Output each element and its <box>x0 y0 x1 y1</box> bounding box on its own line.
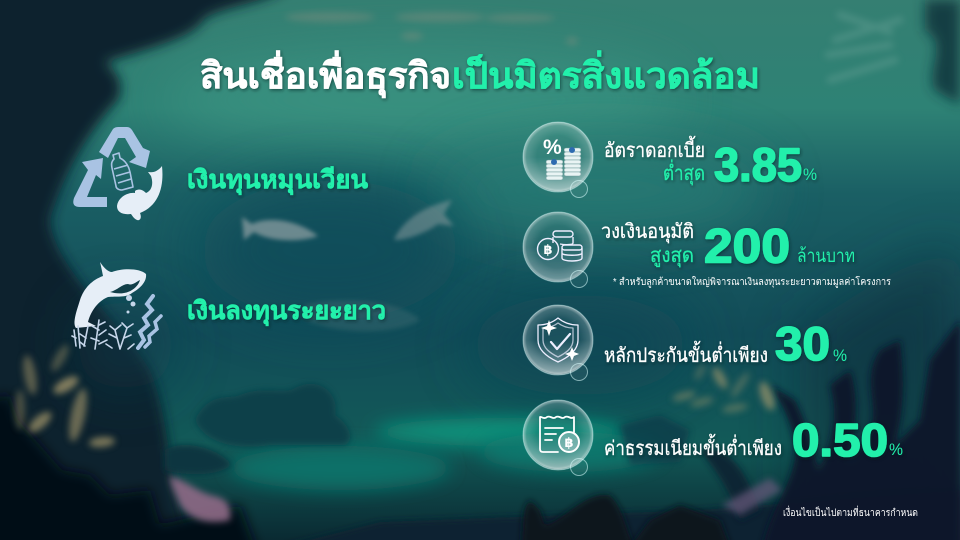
stat: interest rate 3.85%: ต่ำสุด <box>663 159 705 186</box>
icon: coral <box>72 320 134 349</box>
bright seabed band <box>375 418 625 446</box>
icon: whale <box>117 166 162 220</box>
blurred fish <box>242 200 454 331</box>
stat: fee 0.50%: 0.50 <box>792 414 888 466</box>
stat: credit limit 200 million baht: วงเงินอนุมัติ <box>601 221 694 244</box>
title: สินเชื่อเพื่อธุรกิจ <box>200 50 451 99</box>
dark plant silhouettes <box>0 320 960 540</box>
icon: seaweed <box>138 296 161 348</box>
left dark rock <box>0 0 295 540</box>
bubble: interest rate <box>523 122 593 198</box>
stat: credit limit 200 million baht: ล้านบาท <box>797 246 855 267</box>
bubble: credit limit <box>523 212 593 288</box>
pink coral <box>170 476 782 522</box>
title <box>200 50 760 99</box>
stat: collateral 30% <box>604 317 847 370</box>
icon: recycle arrows with bottle and whale <box>73 127 162 220</box>
bubble: fee <box>523 400 593 476</box>
stat: collateral 30%: % <box>833 346 847 365</box>
stat: credit limit 200 million baht: 200 <box>704 220 790 274</box>
bubble: interest rate: % <box>543 136 562 159</box>
stat: collateral 30%: 30 <box>775 317 830 370</box>
stat: fee 0.50% <box>604 414 903 466</box>
stat: fee 0.50%: % <box>889 440 903 459</box>
heading: working capital: เงินทุนหมุนเวียน <box>187 166 368 196</box>
icon: bottle <box>112 153 133 190</box>
stat: fee 0.50%: ค่าธรรมเนียมขั้นต่ำเพียง <box>604 434 782 460</box>
bubble: collateral <box>523 305 593 380</box>
stat: collateral 30%: หลักประกันขั้นต่ำเพียง <box>604 341 768 367</box>
stat: credit limit 200 million baht: สูงสุด <box>650 245 694 268</box>
yellow plants <box>15 343 778 448</box>
top-right pale plant <box>828 15 900 80</box>
heading: long-term investment: เงินลงทุนระยะยาว <box>187 297 386 327</box>
stat: interest rate 3.85% <box>604 136 817 191</box>
stat: interest rate 3.85%: % <box>803 165 817 184</box>
note: large customers: * สำหรับลูกค้าขนาดใหญ่พิจารณาเงินลงทุนระยะยาวตามมูลค่าโครงการ <box>613 275 892 288</box>
bubble: fee: ฿ <box>564 435 574 450</box>
title: เป็นมิตรสิ่งแวดล้อม <box>452 50 760 96</box>
footnote: เงื่อนไขเป็นไปตามที่ธนาคารกำหนด <box>783 505 918 519</box>
top pinkish drift <box>285 12 578 45</box>
icon: orca with coral <box>72 262 161 349</box>
seabed rocks <box>165 384 350 474</box>
stat: credit limit 200 million baht <box>601 220 855 274</box>
bubble: credit limit: ฿ <box>543 242 553 257</box>
stat: interest rate 3.85%: 3.85 <box>714 138 802 191</box>
stat: interest rate 3.85%: อัตราดอกเบี้ย <box>604 136 705 162</box>
